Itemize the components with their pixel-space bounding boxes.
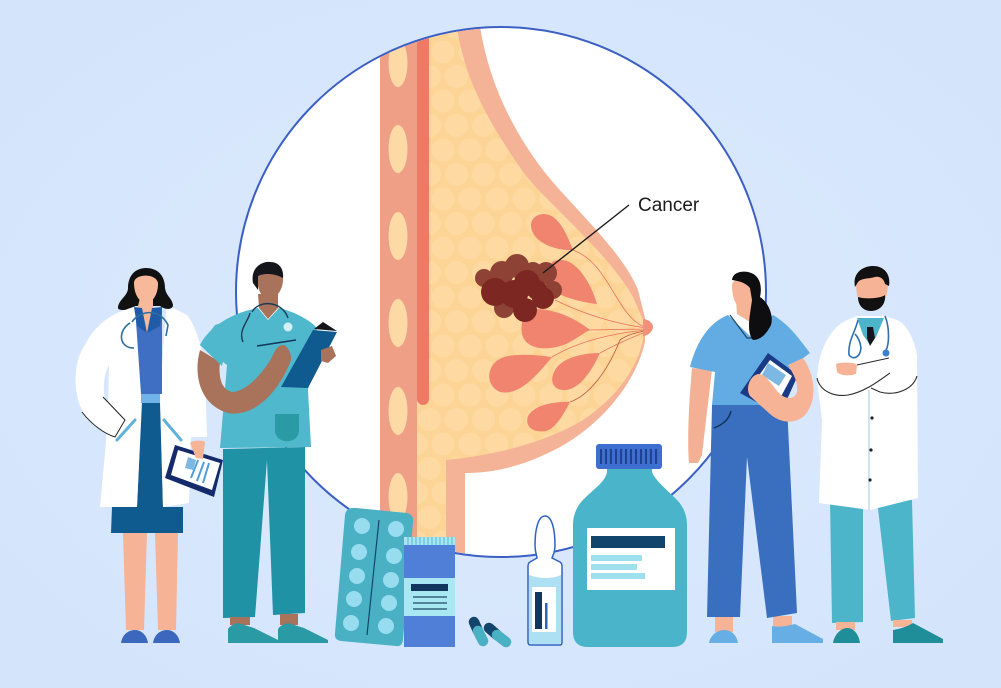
skin layer [440, 20, 645, 560]
nipple [643, 319, 653, 336]
bent arm [197, 345, 291, 414]
pocket line [714, 411, 731, 428]
collar [134, 307, 162, 333]
shoes [228, 623, 328, 643]
collar [730, 315, 753, 338]
shoes [121, 630, 180, 643]
doctor: woman in white coat [76, 268, 223, 643]
medicines [335, 444, 687, 647]
neck [736, 300, 752, 322]
stethoscope [849, 316, 888, 358]
chest wall [380, 20, 418, 560]
scrub top [200, 308, 317, 448]
ampoule [528, 516, 562, 645]
ankles [230, 614, 298, 625]
pen [257, 340, 296, 346]
milk ducts [552, 250, 648, 402]
hair [855, 266, 889, 287]
infographic canvas [76, 26, 943, 648]
ribs [388, 39, 408, 521]
skirt [111, 403, 183, 533]
ankles [836, 620, 912, 630]
hair [118, 268, 173, 310]
scrub top [690, 315, 810, 405]
hand [190, 441, 205, 459]
ankles [715, 616, 792, 632]
white coat [817, 316, 918, 510]
blue shirt [135, 307, 162, 394]
stethoscope [242, 304, 288, 342]
shoes [709, 624, 823, 643]
large bottle [573, 444, 687, 647]
legs [123, 533, 178, 630]
hair [732, 272, 772, 340]
breast anatomy [380, 20, 653, 560]
clipboard [165, 445, 223, 497]
chest piece [882, 350, 890, 356]
pants [830, 500, 915, 623]
crossed arms [817, 358, 917, 395]
doctor: man in white coat [817, 266, 943, 643]
circle panel: breast cross-section [236, 20, 766, 560]
nurse: man in teal scrubs [197, 262, 337, 643]
muscle strip [417, 20, 429, 405]
tie [867, 327, 875, 346]
pants [223, 447, 305, 618]
hand on clipboard [321, 346, 336, 363]
chest piece [284, 322, 292, 332]
face [856, 276, 888, 310]
nurse: woman in blue scrubs [688, 272, 823, 643]
belt [141, 394, 160, 403]
clip [314, 322, 337, 331]
shoes [833, 623, 943, 643]
clipboard [281, 330, 337, 388]
milk lobules [489, 214, 600, 431]
fatty tissue [417, 20, 643, 560]
face [134, 276, 158, 303]
hair [253, 262, 283, 290]
placket and buttons [868, 390, 874, 510]
coat pens [117, 420, 181, 440]
pants [707, 405, 797, 618]
sleeve [200, 320, 232, 366]
beard [858, 295, 885, 311]
tumor [475, 254, 562, 322]
white coat [76, 306, 207, 507]
clipboard [740, 353, 798, 415]
left arm [688, 368, 712, 463]
bent arm [748, 358, 813, 422]
face [732, 278, 760, 308]
label: Cancer: Cancer [638, 195, 700, 216]
coat fold line [82, 397, 125, 437]
shirt [857, 318, 884, 345]
neck [137, 298, 153, 333]
pill box [404, 537, 455, 647]
capsules [474, 622, 506, 642]
stethoscope [121, 313, 168, 348]
pocket [275, 414, 299, 441]
blister pack [335, 508, 413, 646]
cancer leader line [543, 205, 629, 273]
neck and face [258, 294, 278, 319]
